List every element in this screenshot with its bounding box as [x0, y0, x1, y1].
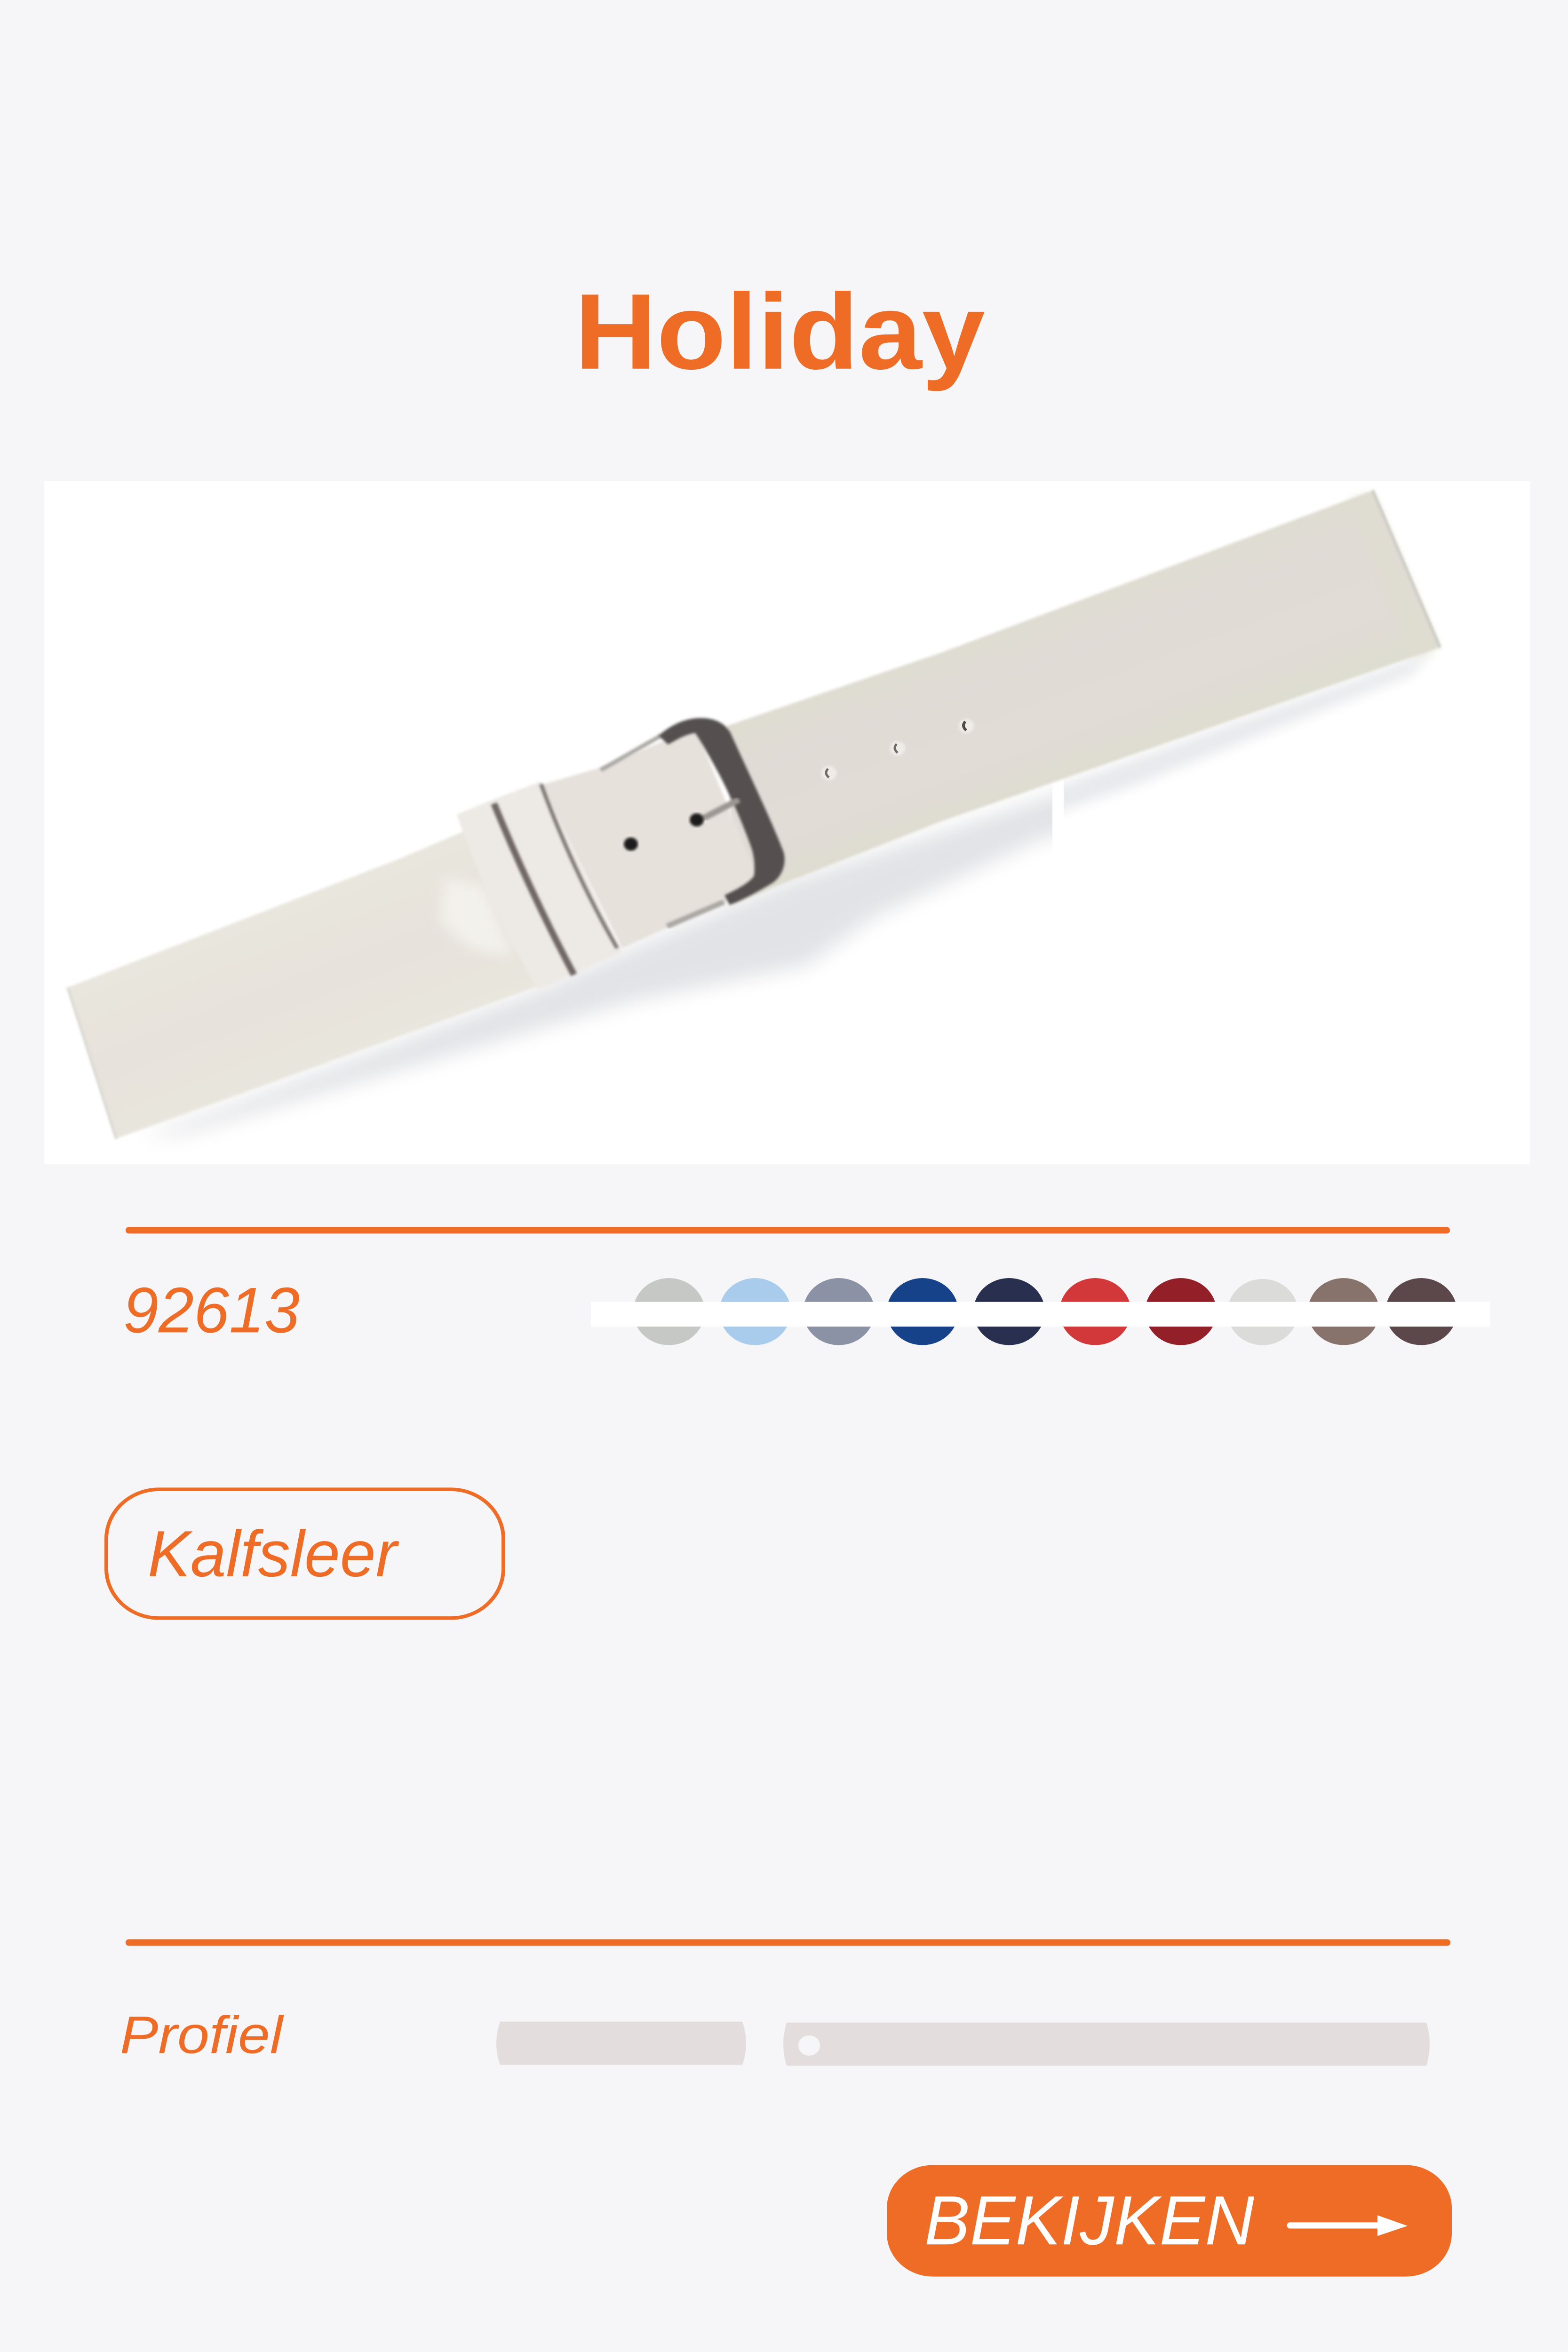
arrow: [1287, 2215, 1408, 2236]
colour swatches: [591, 1278, 1490, 1345]
profile label: Profiel: [120, 2005, 284, 2065]
strap: long section: [727, 491, 1440, 904]
title: Holiday: [574, 272, 985, 392]
panel: product photo: [44, 481, 1530, 1164]
divider line bottom: [126, 1939, 1450, 1946]
watch strap: [68, 491, 1440, 1139]
product number: 92613: [123, 1274, 300, 1346]
button: [887, 2165, 1452, 2277]
strap: short section: [68, 820, 555, 1139]
button: BEKIJKEN: [924, 2182, 1254, 2259]
buckle: [601, 718, 785, 926]
strap holes: [624, 719, 974, 851]
profile shape short: [496, 2022, 746, 2065]
material tag: [106, 1489, 503, 1618]
middle section: [541, 728, 757, 948]
shadow under strap: [141, 653, 1430, 1138]
profile shape long: [783, 2023, 1430, 2066]
divider line top: [126, 1227, 1450, 1233]
keeper loop: [457, 781, 622, 990]
keeper lines: [494, 803, 574, 975]
material tag: Kalfsleer: [148, 1518, 399, 1590]
